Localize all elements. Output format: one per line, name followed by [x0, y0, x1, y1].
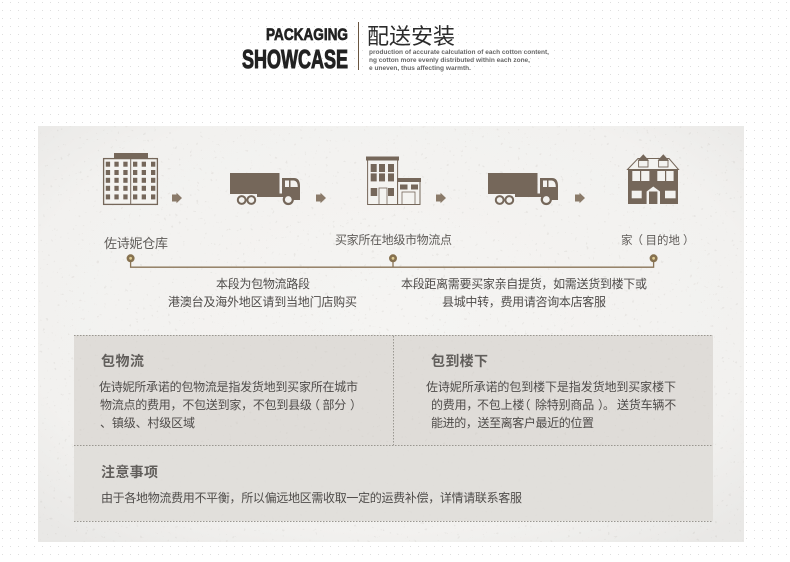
title: PACKAGING: PACKAGING [266, 25, 348, 44]
label: home destination: ） [683, 234, 694, 247]
timeline pin 1 [127, 254, 135, 262]
title: 配送安装: 配送安装 [367, 24, 455, 49]
section: 包物流: 佐诗妮所承诺的包物流是指发货地到买家所在城市 [99, 379, 358, 394]
section: 包到楼下: 。 [603, 398, 615, 412]
note: buyer pickup segment [401, 276, 647, 309]
section: 包到楼下: 除特别商品 [535, 397, 594, 412]
note: buyer pickup segment: 县城中转，费用请咨询本店客服 [442, 294, 606, 309]
subtitle text: e uneven, thus affecting warmth. [369, 65, 471, 72]
section: 包物流: 包物流 [101, 353, 144, 369]
arrow 1 [172, 193, 182, 203]
section: 包到楼下: 包到楼下 [431, 353, 488, 369]
note: buyer pickup segment: 本段距离需要买家亲自提货，如需送货到楼下或 [401, 276, 647, 291]
section: 包物流: 物流点的费用，不包送到家，不包到县级 [100, 398, 312, 412]
section: 包物流: ） [350, 398, 362, 412]
heading: packaging showcase [242, 22, 549, 74]
timeline pin 2 [389, 254, 397, 262]
label: home destination: （ [632, 234, 643, 247]
arrow 2 [316, 193, 326, 203]
icon: house [628, 154, 678, 204]
subtitle text [369, 49, 549, 72]
section: 注意事项 [101, 464, 522, 505]
timeline [127, 254, 658, 267]
icon: local logistics building [366, 156, 421, 204]
title: SHOWCASE: SHOWCASE [242, 44, 348, 74]
subtitle text: ng cotton more evenly distributed within each zone, [369, 57, 530, 64]
section: 注意事项: 注意事项 [101, 464, 158, 480]
icon: warehouse building [104, 153, 157, 205]
section: 包物流: （ [308, 398, 320, 412]
section: 注意事项: 由于各地物流费用不平衡，所以偏远地区需收取一定的运费补偿，详情请联系客服 [101, 490, 522, 505]
label: home destination: 家 [621, 235, 632, 247]
section: 包到楼下: 送货车辆不 [617, 397, 676, 412]
panel: delivery information [38, 126, 744, 542]
panel: info table [74, 335, 713, 522]
icon: truck 1 [230, 173, 300, 204]
section: 包到楼下: ） [598, 398, 610, 412]
section: 包到楼下: 不包上楼 [477, 397, 524, 412]
section: 包到楼下: 佐诗妮所承诺的包到楼下是指发货地到买家楼下 [426, 379, 676, 394]
section: 包物流 [99, 353, 362, 430]
section: 包物流: 、镇级、村级区域 [100, 416, 195, 430]
section: 包到楼下 [426, 353, 676, 430]
label: warehouse: 佐诗妮仓库 [104, 236, 168, 251]
subtitle text: production of accurate calculation of each cotton content, [369, 49, 549, 56]
arrow 4 [575, 193, 585, 203]
timeline pin 3 [650, 254, 658, 262]
section: 包到楼下: 能进的，送至离客户最近的位置 [431, 415, 594, 430]
note: prepaid logistics segment: 本段为包物流路段 [216, 276, 310, 291]
arrow 3 [436, 193, 446, 203]
note: prepaid logistics segment: 港澳台及海外地区请到当地门店购买 [168, 294, 357, 309]
section: 包到楼下: 的费用， [431, 398, 478, 412]
section: 包物流: 部分 [322, 397, 346, 412]
note: prepaid logistics segment [168, 276, 357, 309]
label: local logistics point: 买家所在地级市物流点 [335, 232, 452, 247]
label: home destination: 目的地 [646, 233, 680, 247]
icon: truck 2 [488, 173, 558, 204]
section: 包到楼下: （ [518, 398, 530, 412]
